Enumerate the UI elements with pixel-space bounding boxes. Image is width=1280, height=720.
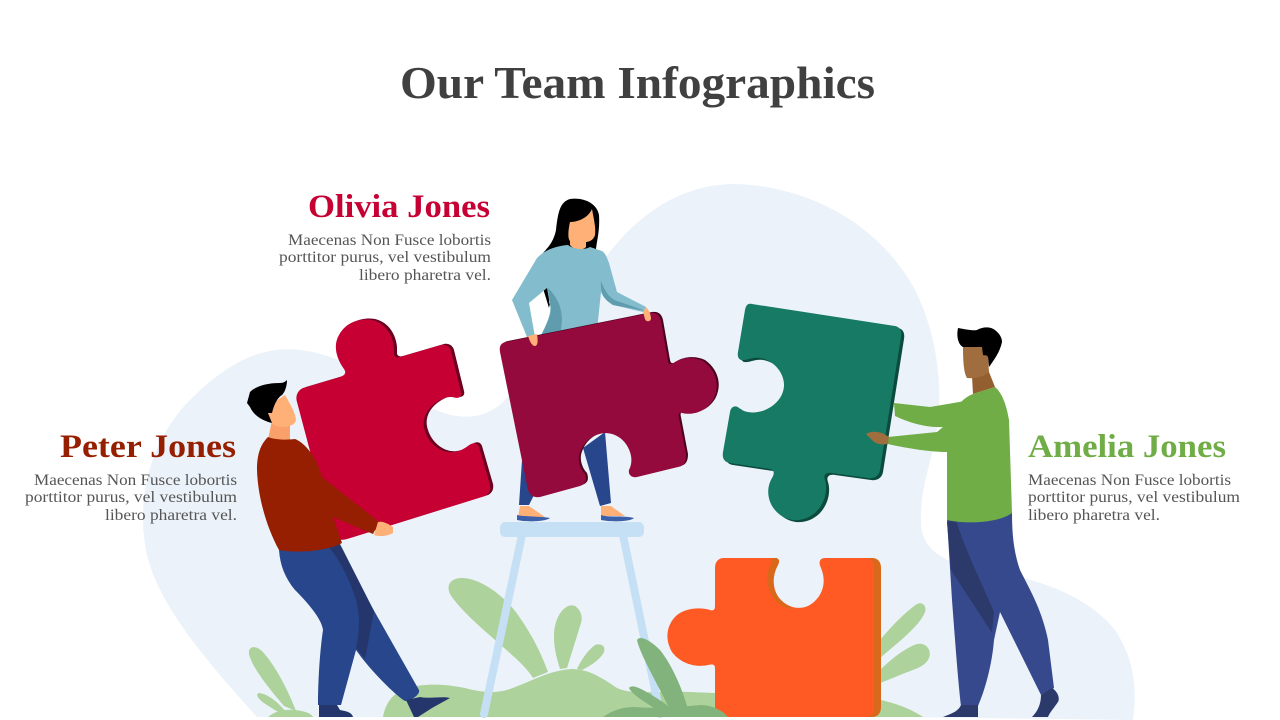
name: Olivia Jones: [308, 189, 490, 225]
shirt: [888, 387, 1012, 522]
description: libero pharetra vel.: [359, 267, 491, 284]
face: [963, 345, 989, 378]
shirt: [512, 245, 646, 340]
hair: [957, 327, 1002, 367]
title: Our Team Infographics: [400, 57, 875, 108]
hair: [247, 380, 287, 423]
plant: left small: [249, 647, 313, 717]
plants: [249, 578, 930, 717]
far arm: [894, 401, 970, 427]
puzzle piece: green: [723, 304, 904, 522]
description: Maecenas Non Fusce lobortis: [1028, 472, 1231, 489]
hand: [866, 432, 889, 444]
text block: Amelia Jones: [1028, 429, 1241, 524]
dark leaf tall: [637, 638, 688, 710]
pants: [279, 542, 419, 705]
puzzle piece: orange: [667, 558, 881, 717]
shirt shading: [541, 281, 646, 335]
notch shading: [767, 558, 796, 609]
puzzle piece: red: [296, 319, 493, 540]
text block: Peter Jones: [25, 429, 238, 524]
legs: [519, 432, 611, 506]
shoes: [517, 515, 634, 521]
dark leaf low: [629, 686, 674, 712]
description: porttitor purus, vel vestibulum: [25, 489, 238, 506]
plant: right leaves: [880, 603, 930, 683]
description: porttitor purus, vel vestibulum: [279, 249, 492, 266]
name: Peter Jones: [60, 429, 236, 465]
stool: [484, 522, 660, 714]
description: [1028, 472, 1241, 524]
description: porttitor purus, vel vestibulum: [1028, 489, 1241, 506]
shoes: [943, 688, 1059, 717]
plant: mound: [383, 669, 923, 717]
feet: [518, 506, 625, 517]
pants shading: [328, 544, 374, 659]
woman: [512, 199, 646, 521]
text block: Olivia Jones: [279, 189, 492, 284]
description: [279, 232, 492, 284]
background blob: [143, 184, 1135, 720]
puzzle piece: maroon: [500, 312, 719, 497]
name: Amelia Jones: [1028, 429, 1226, 465]
face: [268, 395, 296, 427]
woman's hands: [528, 307, 651, 346]
shoes: [319, 697, 450, 717]
shirt: [257, 437, 379, 552]
description: libero pharetra vel.: [105, 507, 237, 524]
pants: [947, 512, 1054, 706]
description: libero pharetra vel.: [1028, 507, 1160, 524]
dark foreground plants: [603, 638, 728, 717]
hand: [374, 522, 393, 536]
description: [25, 472, 238, 524]
description: Maecenas Non Fusce lobortis: [34, 472, 237, 489]
description: Maecenas Non Fusce lobortis: [288, 232, 491, 249]
neck: [268, 420, 290, 440]
neck: [972, 372, 995, 394]
man: Peter: [247, 380, 450, 717]
dark mound: [603, 705, 728, 717]
man: dark-skinned figure: [866, 327, 1059, 717]
pants shading: [947, 520, 994, 633]
face and neck: [568, 209, 595, 249]
hair: [535, 199, 599, 308]
plant: central leaves: [448, 578, 604, 678]
